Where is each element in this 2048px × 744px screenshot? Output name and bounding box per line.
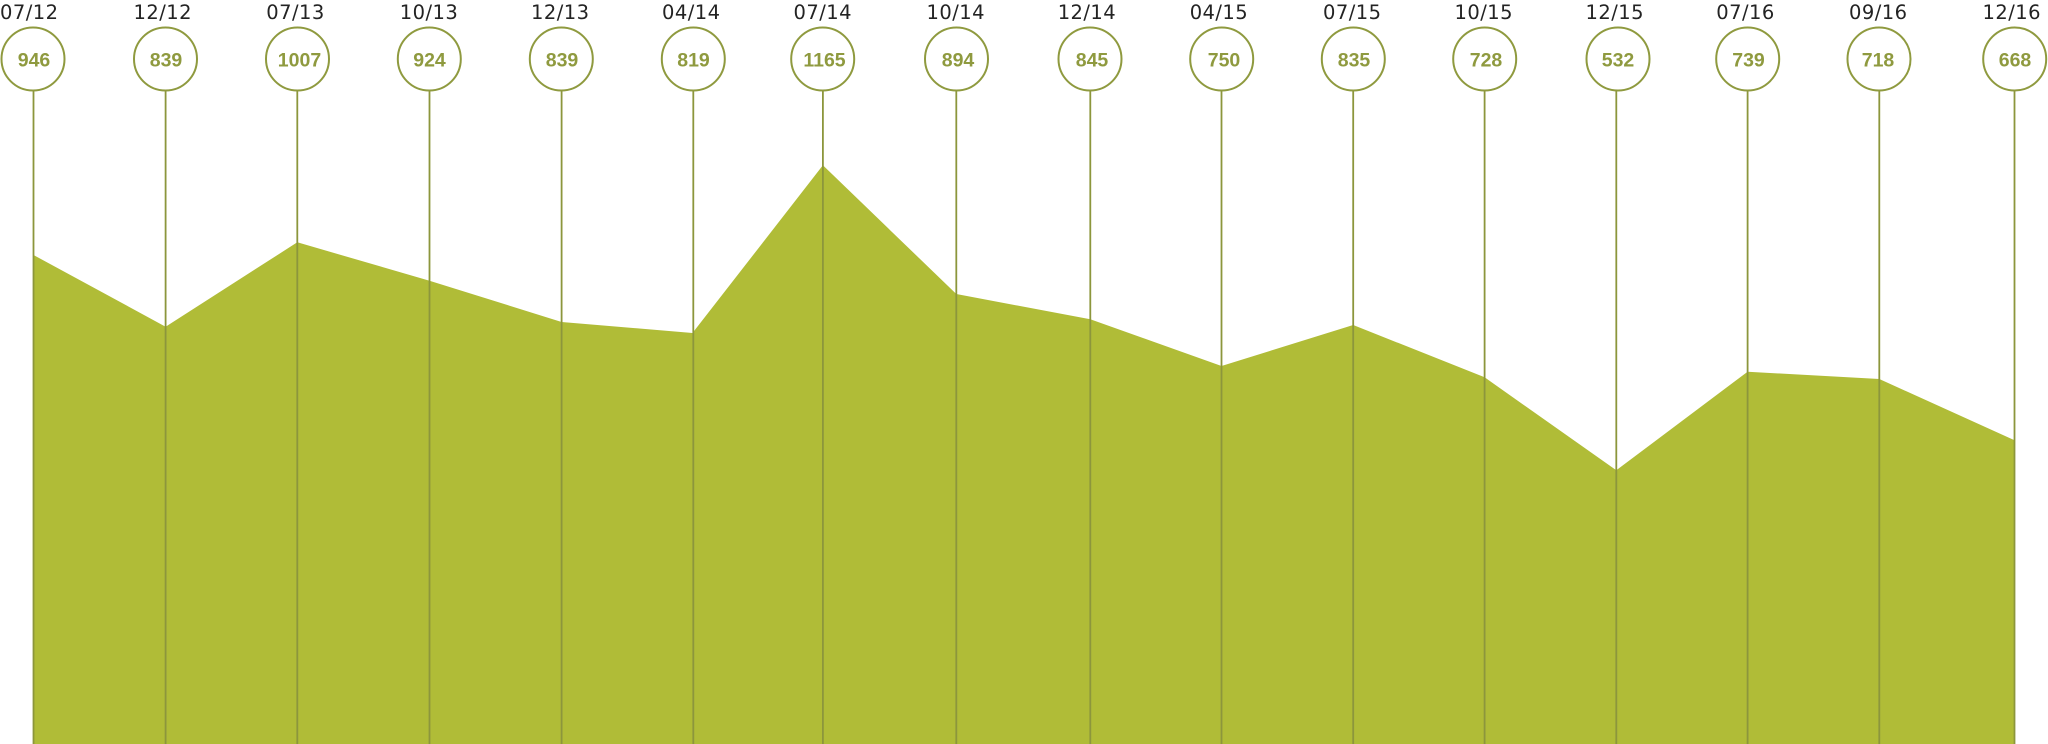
marker: 07/15 value 835 [1322,1,1385,744]
marker: 09/16 value 718 [1848,1,1910,744]
marker: 12/14 value 845: 12/14 [1058,1,1116,24]
marker: 04/14 value 819: 819 [677,50,710,72]
marker: 12/16 value 668: 668 [1999,50,2031,72]
marker: 10/14 value 894: 10/14 [926,1,984,24]
marker: 12/13 value 839: 839 [546,50,578,72]
marker: 10/13 value 924: 10/13 [400,1,458,24]
filled area series [34,165,2014,744]
marker: 07/13 value 1007 [266,1,329,744]
marker: 12/14 value 845: 845 [1076,50,1108,72]
marker: 07/16 value 739: 739 [1732,50,1765,72]
marker: 04/14 value 819: 04/14 [662,1,720,24]
marker: 10/15 value 728: 10/15 [1454,1,1512,24]
marker: 04/15 value 750: 750 [1208,50,1240,72]
marker: 12/13 value 839 [530,1,593,744]
marker: 07/14 value 1165: 1165 [803,50,846,72]
marker: 04/14 value 819 [662,1,725,744]
marker: 07/12 value 946: 07/12 [0,1,58,24]
marker: 10/15 value 728 [1453,1,1516,744]
marker: 10/13 value 924: 924 [413,50,446,72]
marker: 12/12 value 839: 12/12 [134,1,192,24]
marker: 12/12 value 839 [134,1,197,744]
marker: 10/13 value 924 [398,1,461,744]
marker: 07/12 value 946: 946 [18,50,50,72]
marker: 12/15 value 532: 532 [1602,50,1634,72]
marker: 07/14 value 1165: 07/14 [794,1,852,24]
marker: 07/12 value 946 [0,1,64,744]
marker: 07/16 value 739: 07/16 [1716,1,1774,24]
marker: 12/16 value 668: 12/16 [1982,1,2040,24]
marker: 07/15 value 835: 835 [1338,50,1370,72]
marker: 07/16 value 739 [1716,1,1779,744]
marker: 07/15 value 835: 07/15 [1323,1,1381,24]
marker: 12/15 value 532 [1586,1,1650,744]
marker: 07/13 value 1007: 1007 [278,50,321,72]
marker: 10/14 value 894: 894 [942,50,974,72]
marker: 12/13 value 839: 12/13 [531,1,589,24]
marker: 12/15 value 532: 12/15 [1586,1,1644,24]
marker: 09/16 value 718: 718 [1862,50,1894,72]
marker: 12/14 value 845 [1058,1,1122,744]
marker: 09/16 value 718: 09/16 [1849,1,1907,24]
marker: 10/15 value 728: 728 [1470,50,1502,72]
marker: 12/16 value 668 [1982,1,2046,744]
marker: 12/12 value 839: 839 [150,50,182,72]
marker: 04/15 value 750 [1190,1,1253,744]
marker: 04/15 value 750: 04/15 [1190,1,1248,24]
marker: 10/14 value 894 [925,1,988,744]
marker: 07/13 value 1007: 07/13 [266,1,324,24]
marker: 07/14 value 1165 [791,1,854,744]
